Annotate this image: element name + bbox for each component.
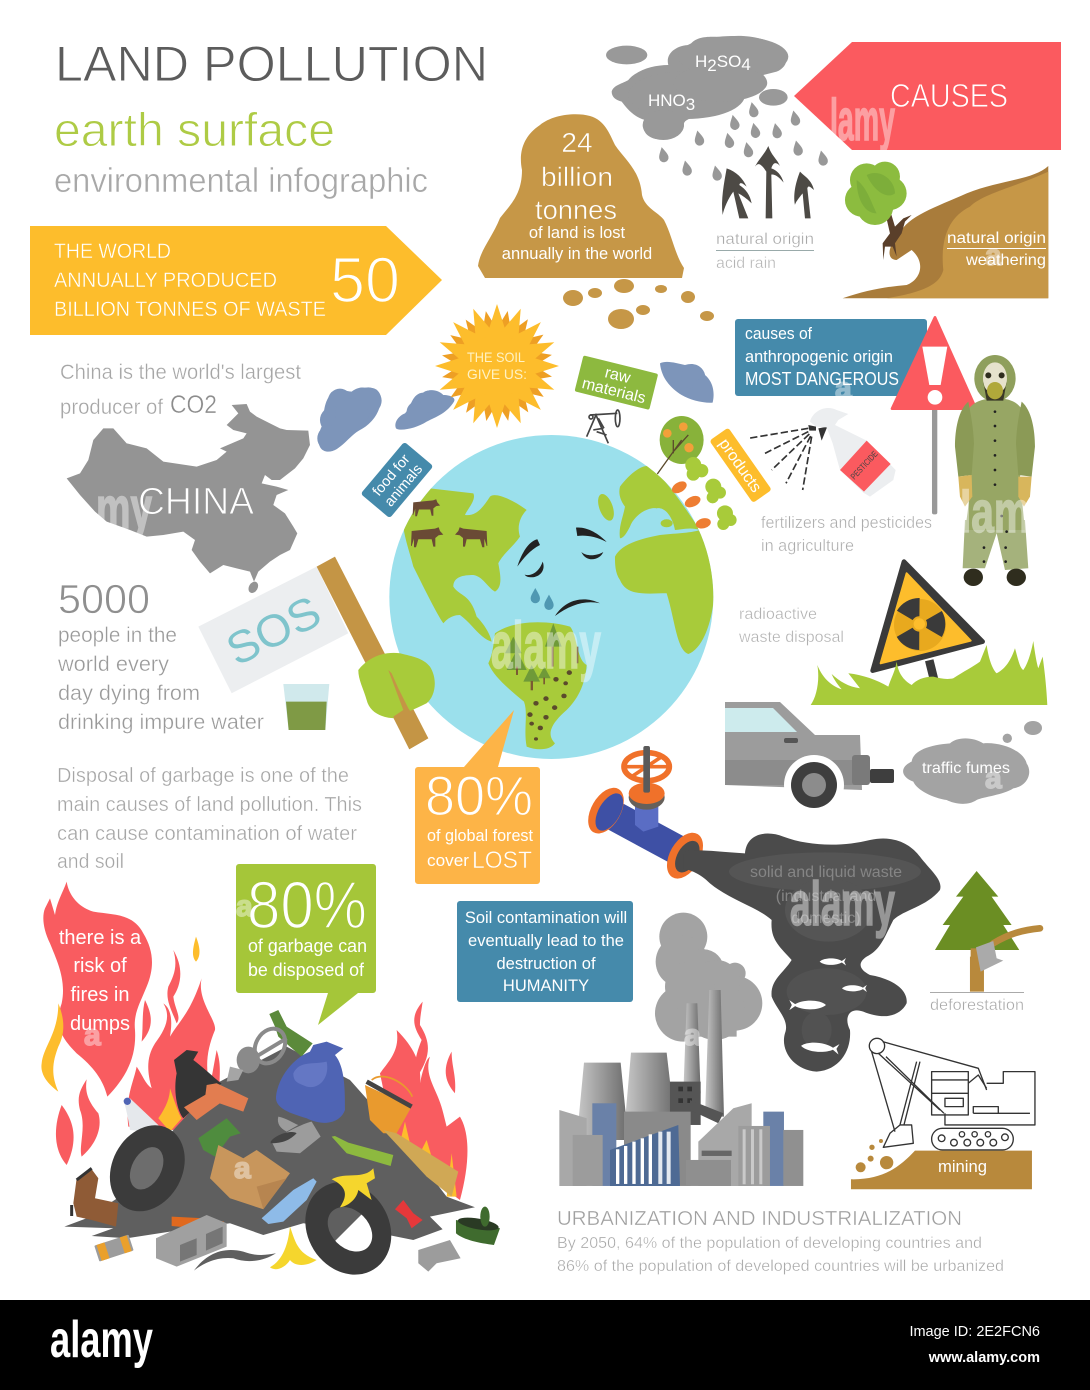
- banner: 50 billion tonnes of waste: BILLION TONNES OF WASTE: [54, 298, 326, 321]
- watermarks: a: [84, 1019, 101, 1052]
- banner: 50 billion tonnes of waste: 50: [330, 244, 400, 316]
- panel: soil contamination: eventually lead to the: [468, 932, 624, 950]
- hood: [974, 355, 1016, 402]
- spill: solid and liquid waste: [683, 834, 940, 1072]
- text: 5000 people: people in the: [58, 624, 177, 647]
- wooden planks: [383, 1130, 458, 1197]
- acid rain drops: [657, 101, 829, 181]
- cooling towers: [577, 1063, 628, 1140]
- flame label: risk of fires: [41, 882, 199, 1097]
- panel: anthropogenic origin: anthropogenic origin: [745, 348, 893, 366]
- face: [517, 528, 607, 616]
- text: disposal of garbage: Disposal of garbage is one of the: [57, 765, 349, 787]
- grey buildings: [559, 1110, 587, 1186]
- icon: fruit tree: [657, 416, 704, 474]
- text: disposal of garbage: can cause contamination of water: [57, 823, 357, 845]
- right tire: [288, 1166, 408, 1291]
- flame label: risk of fires: there is a: [59, 927, 142, 949]
- cloud: blue middle: [395, 390, 454, 430]
- icon: glass of dirty water: [283, 684, 329, 730]
- text: 5000 people: day dying from: [58, 682, 200, 705]
- jacket: [962, 398, 1028, 530]
- tag: food for animals: [361, 442, 433, 518]
- acid rain cloud: 3: [686, 95, 695, 114]
- oil streak: [194, 1250, 276, 1271]
- title: LAND POLLUTION: [55, 36, 488, 92]
- illustration: weathering hillside: natural origin: [947, 230, 1046, 247]
- green can: [456, 1220, 500, 1245]
- watermarks: a: [236, 890, 253, 923]
- orange bottle: [172, 1217, 224, 1228]
- text: china co2: China is the world's largest: [60, 361, 301, 384]
- icon: sun with label: GIVE US:: [467, 366, 527, 382]
- illustration: garbage pile: [64, 1010, 500, 1291]
- cloud: blue left: [317, 387, 382, 452]
- tag: raw materials: materials: [580, 375, 647, 407]
- label: radioactive waste disposal: waste disposal: [738, 629, 844, 646]
- cardboard box: [210, 1145, 290, 1209]
- text: urbanization and industrialization: URBANIZATION AND INDUSTRIALIZATION: [557, 1208, 962, 1230]
- spill: solid and liquid waste: domestic): [791, 910, 861, 927]
- tag: raw materials: raw: [603, 364, 633, 387]
- dead trees: [722, 146, 814, 218]
- north america: [403, 488, 527, 642]
- crushed can: [418, 1240, 461, 1272]
- flame label: risk of fires: risk of: [73, 955, 127, 977]
- banner: 50 billion tonnes of waste: ANNUALLY PRODUCED: [54, 269, 277, 292]
- tag: food for animals: food for: [370, 451, 414, 499]
- watermarks: a: [985, 239, 1002, 272]
- dark plant: [670, 1082, 701, 1125]
- flames behind garbage: [56, 950, 467, 1200]
- acid rain cloud: H: [695, 52, 707, 71]
- acid rain cloud: SO: [717, 52, 741, 71]
- buttons: [983, 410, 1008, 563]
- icon: radiation sign in grass: [811, 562, 1047, 705]
- tag: products: products: [715, 436, 764, 496]
- callout: 80% garbage: 80%: [247, 868, 367, 943]
- cinder block: [156, 1215, 227, 1267]
- callout: 80% garbage: of garbage can: [248, 936, 367, 956]
- icon: valve pipe: [581, 746, 710, 885]
- panel: soil contamination: HUMANITY: [503, 977, 589, 995]
- text: china co2: producer of: [60, 396, 163, 419]
- panel: soil contamination: destruction of: [496, 955, 596, 973]
- face and mask: [983, 362, 1007, 394]
- boot: [73, 1169, 118, 1227]
- tag: products: [709, 428, 772, 503]
- sign: sos: SOS: [218, 585, 329, 676]
- gloves: [958, 475, 1032, 507]
- map: china: [67, 404, 310, 595]
- europe: [619, 466, 700, 538]
- label: fertilizers and pesticides: [761, 514, 932, 555]
- tin can: [272, 1122, 321, 1153]
- title: earth surface: [54, 103, 335, 156]
- africa: [615, 530, 714, 654]
- watermarks: alamy: [790, 870, 895, 939]
- panel: soil contamination: Soil contamination will: [465, 909, 627, 927]
- text: china co2: [60, 361, 301, 419]
- black bag: [174, 1050, 222, 1118]
- text: 5000 people: 5000: [58, 576, 150, 622]
- label: radioactive waste disposal: [738, 606, 844, 646]
- panel: anthropogenic origin: [735, 319, 927, 396]
- chimneys: [683, 1003, 701, 1093]
- label: acid rain: [716, 231, 814, 272]
- text: disposal of garbage: main causes of land pollution. This: [57, 794, 362, 816]
- heap: 24 billion tonnes: annually in the world: [502, 245, 652, 263]
- illustration: weathering hillside: [843, 162, 1048, 298]
- illustration: mining excavator: [851, 1038, 1035, 1189]
- callout: 80% garbage: be disposed of: [248, 960, 365, 980]
- icon: sun with label: [435, 304, 559, 428]
- south america: [488, 622, 587, 749]
- watermarks: lamy: [830, 88, 895, 153]
- mediterranean island: [661, 519, 673, 527]
- britain: [598, 494, 614, 521]
- cloud: blue right: [660, 362, 714, 403]
- spill: solid and liquid waste: (industrial and: [776, 888, 876, 905]
- label: fertilizers and pesticides: fertilizers and pesticides: [761, 514, 932, 532]
- figure: person in protective suit: [955, 355, 1035, 586]
- watermarks: a: [684, 1019, 701, 1052]
- footer: alamy stock band: [0, 1300, 1090, 1390]
- heap: 24 billion tonnes: tonnes: [535, 195, 617, 225]
- illustration: factory with smoke: [559, 913, 803, 1186]
- panel: anthropogenic origin: MOST DANGEROUS: [745, 369, 899, 389]
- text: urbanization and industrialization: 86% of the population of developed countries will be urbanized: [557, 1258, 1004, 1275]
- watermarks: alamy: [491, 608, 601, 682]
- icon: pesticide spray bottle: [748, 408, 896, 497]
- banana on tire: [332, 1168, 375, 1207]
- text: urbanization and industrialization: [557, 1208, 1004, 1275]
- watermarks: a: [835, 372, 852, 405]
- cows: [411, 499, 487, 547]
- label: acid rain: natural origin: [716, 231, 814, 248]
- blue bottle: [262, 1178, 317, 1224]
- acid rain cloud: 4: [741, 55, 751, 74]
- label: radioactive waste disposal: radioactive: [739, 606, 817, 623]
- acid rain cloud: [606, 36, 788, 140]
- watermarks: [84, 88, 1030, 1185]
- apple core: [395, 1200, 423, 1228]
- watermarks: a: [985, 762, 1002, 795]
- callout: 80% garbage: [236, 864, 376, 1025]
- heap: 24 billion tonnes: 24: [561, 127, 593, 158]
- flame label: risk of fires: dumps: [70, 1013, 130, 1035]
- banner: causes: [794, 42, 1061, 150]
- banner: 50 billion tonnes of waste: THE WORLD: [54, 240, 171, 263]
- panel: anthropogenic origin: causes of: [745, 325, 812, 343]
- map: china: CHINA: [138, 481, 255, 523]
- icon: pesticide spray bottle: PESTICIDE: [848, 449, 880, 481]
- heap: 24 billion tonnes: of land is lost: [529, 224, 626, 242]
- banner: 50 billion tonnes of waste: [30, 226, 442, 335]
- acid rain cloud: HNO: [648, 91, 686, 110]
- illustration: weathering hillside: weathering: [965, 252, 1046, 269]
- icon: car with exhaust: [725, 702, 894, 815]
- green bottle: [332, 1136, 393, 1166]
- label: fertilizers and pesticides: in agriculture: [761, 537, 854, 555]
- spill: solid and liquid waste: solid and liquid waste: [750, 864, 902, 881]
- soil particles: [563, 279, 714, 329]
- text: urbanization and industrialization: By 2050, 64% of the population of developing countries and: [557, 1235, 982, 1252]
- heap: 24 billion tonnes: billion: [541, 162, 613, 192]
- footer: alamy stock band: alamy: [50, 1311, 153, 1369]
- smoke: [655, 913, 762, 1042]
- heap: 24 billion tonnes: [478, 114, 684, 278]
- tag: food for animals: animals: [382, 462, 426, 510]
- label: acid rain: acid rain: [716, 255, 776, 272]
- boots: [964, 569, 1026, 586]
- trousers: [963, 520, 1028, 570]
- hand: [358, 653, 435, 718]
- banner: causes: CAUSES: [890, 77, 1008, 114]
- panel: soil contamination: [457, 901, 633, 1002]
- globe: [389, 435, 714, 759]
- text: disposal of garbage: and soil: [57, 851, 124, 873]
- tears: [531, 588, 554, 610]
- forest on south america: [505, 623, 578, 741]
- callout: 80% forest lost: cover: [427, 851, 469, 870]
- grey valve: [249, 1023, 291, 1069]
- icon: oil pump jack: [587, 410, 620, 443]
- title: [54, 36, 488, 200]
- blue bag: [276, 1042, 345, 1123]
- acid rain cloud: 2: [707, 56, 717, 75]
- text: disposal of garbage: [57, 765, 362, 873]
- tag: raw materials: [575, 355, 658, 410]
- left tire: [95, 1112, 199, 1224]
- callout: 80% forest lost: of global forest: [427, 826, 533, 845]
- orange bucket: [365, 1085, 412, 1133]
- icon: carrots: [670, 457, 737, 530]
- illustration: deforestation: [930, 871, 1040, 1014]
- text: 5000 people: [57, 576, 264, 734]
- text: china co2: CO2: [170, 391, 217, 419]
- footer: alamy stock band: Image ID: 2E2FCN6: [909, 1324, 1040, 1340]
- sign: sos: [198, 557, 435, 749]
- green rag: [198, 1118, 241, 1157]
- illustration: mining excavator: mining: [938, 1157, 987, 1176]
- flame label: risk of fires: fires in: [71, 984, 129, 1006]
- callout: 80% forest lost: 80%: [425, 764, 533, 827]
- bricks: [184, 1083, 248, 1120]
- footer: alamy stock band: www.alamy.com: [928, 1350, 1040, 1366]
- watermarks: my: [96, 476, 152, 541]
- battery: [94, 1235, 134, 1262]
- watermarks: lam: [960, 480, 1030, 545]
- cloud: traffic fumes: traffic fumes: [922, 760, 1010, 777]
- callout: 80% forest lost: LOST: [472, 847, 532, 874]
- small yellow flames: [158, 1088, 457, 1197]
- illustration: deforestation: deforestation: [930, 997, 1024, 1014]
- title: environmental infographic: [54, 162, 428, 200]
- icon: sun with label: THE SOIL: [467, 349, 525, 365]
- banana peel: [270, 1227, 317, 1269]
- green bottle top: [269, 1010, 313, 1057]
- watermarks: a: [234, 1152, 251, 1185]
- text: 5000 people: drinking impure water: [58, 711, 264, 734]
- white bottle: [123, 1098, 160, 1132]
- text: 5000 people: world every: [57, 653, 170, 676]
- mound: [64, 1047, 475, 1240]
- icon: warning sign: [892, 317, 976, 514]
- callout: 80% forest lost: [415, 710, 540, 884]
- cloud: traffic fumes: [903, 721, 1042, 804]
